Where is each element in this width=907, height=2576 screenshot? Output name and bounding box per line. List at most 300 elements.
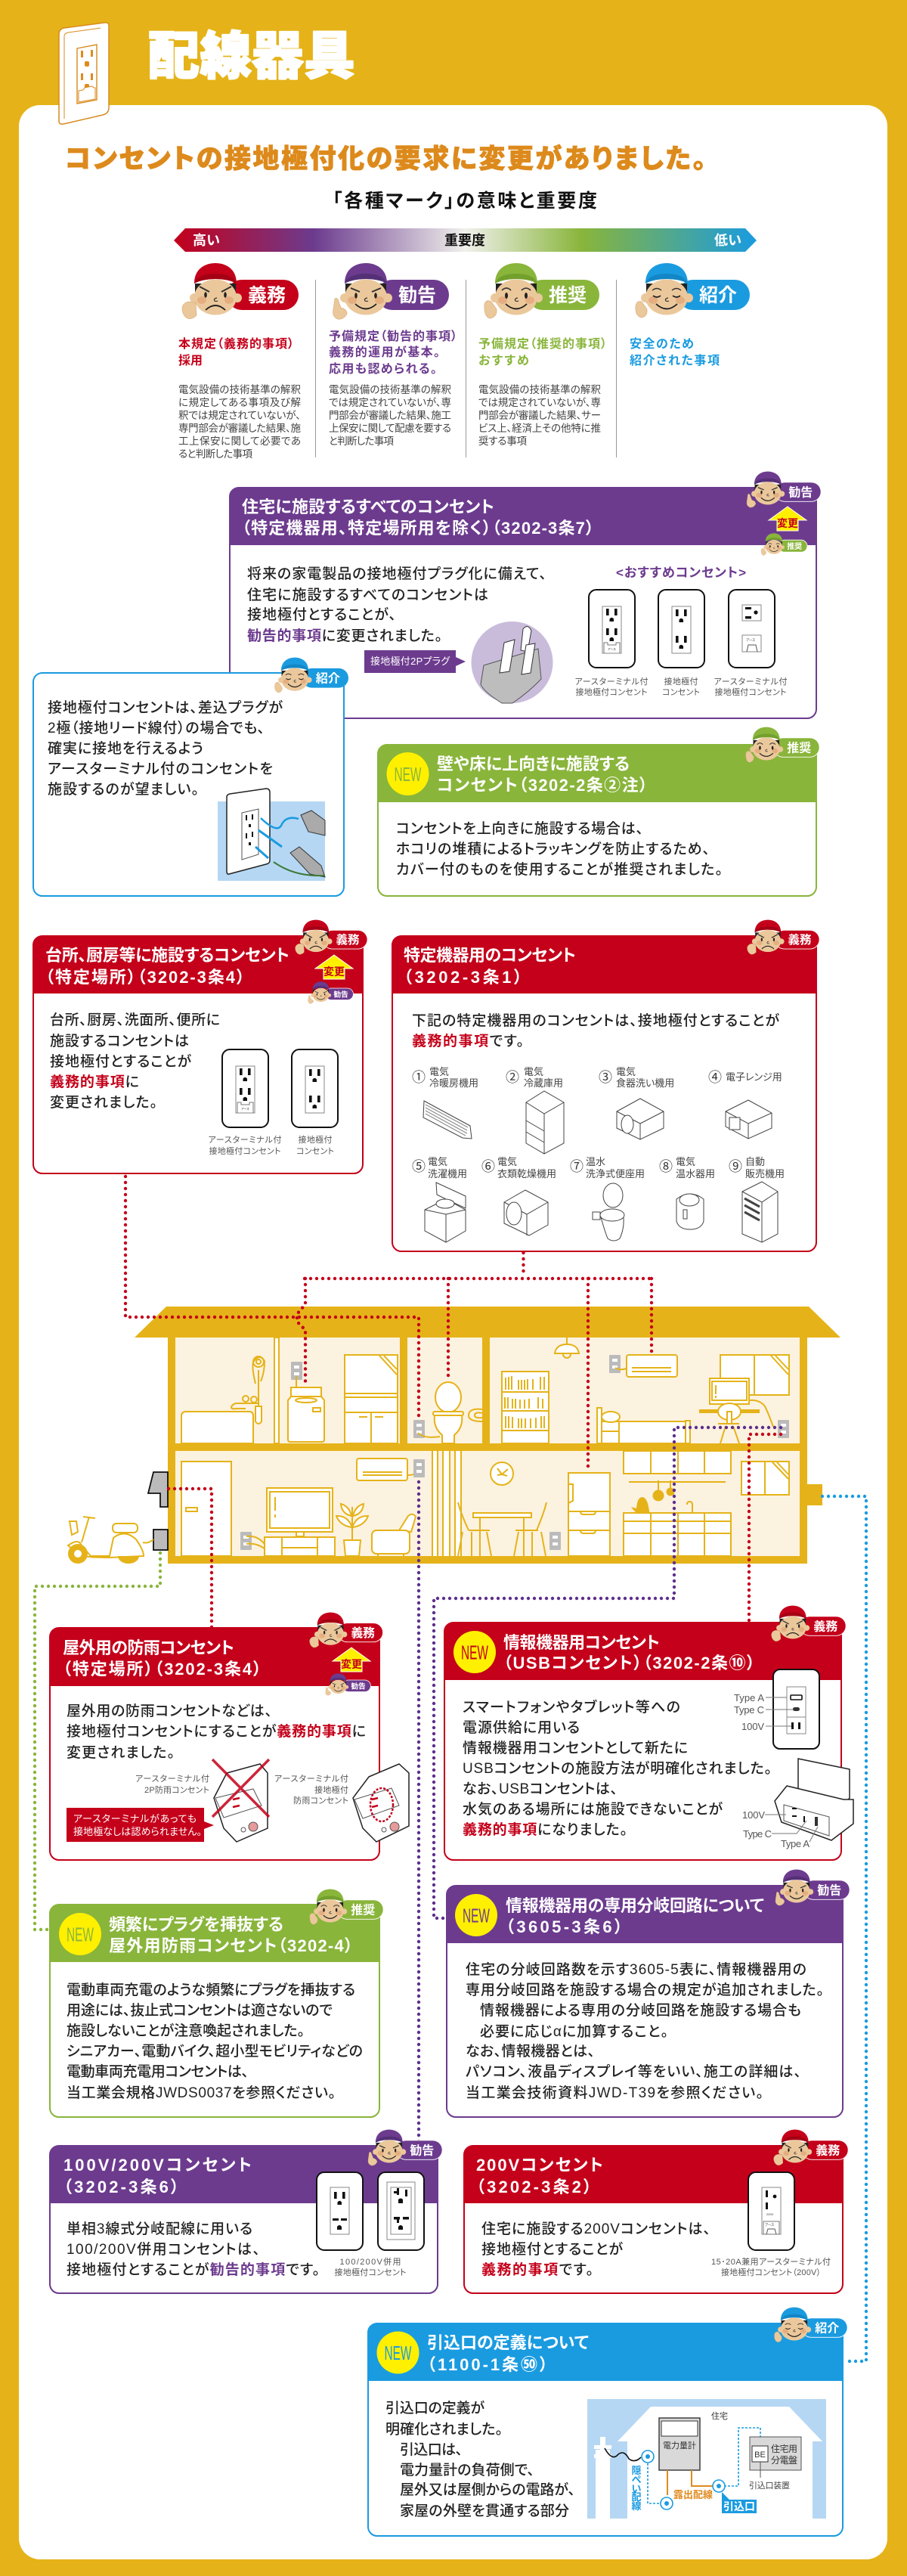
badge: 勧告 xyxy=(368,2130,442,2165)
body text xyxy=(396,820,723,878)
dining table and chairs xyxy=(458,1502,561,1556)
panel heading: 情報機器用の専用分岐回路について xyxy=(506,1896,764,1915)
badge: 推奨 xyxy=(746,727,819,762)
diagram: service entrance: 露出配線 xyxy=(673,2489,713,2500)
panel heading: 屋外用防雨コンセント（3202-4） xyxy=(109,1936,353,1955)
outlet: アース xyxy=(765,2223,775,2227)
outlets: コンセント xyxy=(296,1146,334,1156)
new mark: NEW xyxy=(463,1904,490,1927)
badge: 紹介 xyxy=(275,658,348,693)
badge: 推奨 xyxy=(484,263,599,318)
body text: 施設しないことが注意喚起されました。 xyxy=(67,2023,305,2039)
appliance labels: 電気 xyxy=(428,1156,447,1167)
panel: frequently plugged outdoor outlets xyxy=(50,1889,383,2117)
body text: 屋外又は屋側からの電路が、 xyxy=(400,2481,575,2498)
recommended outlets: コンセント xyxy=(662,687,700,697)
badge: 推奨: 推奨 xyxy=(787,741,811,755)
body text: 用途には、抜止式コンセントは適さないので xyxy=(67,2002,333,2019)
body text: 電源供給に用いる xyxy=(463,1719,580,1736)
panel heading: （USBコンセント）（3202-2条⑩） xyxy=(503,1654,755,1672)
panel heading: 屋外用の防雨コンセント xyxy=(63,1638,234,1657)
mark: 義務: 電気設備の技術基準の解釈 xyxy=(178,383,301,395)
icon: grounded plug xyxy=(472,622,553,703)
appliance labels: 温水 xyxy=(586,1156,605,1167)
body text: 屋外用の防雨コンセントなどは、 xyxy=(67,1703,272,1719)
body text: 義務的事項です。 xyxy=(412,1033,524,1049)
diagram: service entrance: い xyxy=(632,2483,642,2494)
outdoor outlet xyxy=(148,1472,168,1507)
illustration: USB floor outlet: Type C xyxy=(743,1828,772,1840)
appliance labels: 電気 xyxy=(676,1156,695,1167)
body text: 必要に応じαに加算すること。 xyxy=(480,2023,668,2040)
appliance labels: ⑥ xyxy=(481,1159,495,1174)
badge: 義務: 義務 xyxy=(788,932,812,947)
importance gradient arrow: 重要度 xyxy=(444,233,485,248)
body text: 情報機器用コンセントとして新たに xyxy=(463,1740,688,1756)
importance gradient arrow: 低い xyxy=(714,233,741,248)
new mark: NEW xyxy=(384,2342,412,2364)
badge: 義務: 義務 xyxy=(336,932,360,947)
badge: 義務: 義務 xyxy=(813,1619,837,1633)
mark: 義務: 採用 xyxy=(178,354,203,367)
appliance: clothes dryer xyxy=(504,1190,548,1235)
badge: 紹介 xyxy=(636,263,750,318)
illustration: USB wall outlet: Type A xyxy=(734,1692,764,1703)
change arrow xyxy=(333,1648,370,1672)
panel heading xyxy=(404,946,576,987)
panel heading xyxy=(109,1915,353,1955)
mark: 勧告: 電気設備の技術基準の解釈 xyxy=(329,383,452,395)
badge: 義務 xyxy=(772,1606,846,1641)
scooter xyxy=(68,1517,153,1564)
plant xyxy=(336,1504,368,1556)
badge: 紹介: 紹介 xyxy=(316,672,340,686)
illustration: USB wall outlet: 100V xyxy=(741,1721,764,1732)
body text: 将来の家電製品の接地極付プラグ化に備えて、 xyxy=(247,566,546,582)
illustration: USB wall outlet: Type C xyxy=(734,1704,764,1716)
appliance: air conditioner xyxy=(423,1101,472,1139)
appliance labels: 冷蔵庫用 xyxy=(524,1077,563,1089)
illustration: grounded rainproof outlet: 防雨コンセント xyxy=(293,1795,348,1806)
recommended outlets: 接地極付 xyxy=(664,676,698,687)
mark: 勧告: と判断した事項 xyxy=(329,436,395,447)
panel heading: コンセント（3202-2条②注） xyxy=(437,776,648,795)
illustration: grounded rainproof outlet: 接地極付 xyxy=(314,1784,348,1795)
outlet xyxy=(711,2172,831,2277)
outlet: 15･20A兼用アースターミナル付 xyxy=(711,2257,831,2267)
panel heading: （1100-1条㊿） xyxy=(427,2355,548,2374)
recommended outlets: アースターミナル付 xyxy=(714,677,788,687)
badge: 紹介 xyxy=(774,2308,847,2342)
small badge: 勧告: 勧告 xyxy=(333,989,348,999)
body text xyxy=(67,2221,320,2278)
body text: 変更されました。 xyxy=(67,1744,175,1761)
body text xyxy=(385,2400,575,2519)
diagram: service entrance: 住宅用 xyxy=(771,2444,797,2454)
change arrow xyxy=(315,955,353,979)
body text xyxy=(463,1698,772,1838)
body text: 義務的事項に xyxy=(50,1074,139,1090)
mark: 義務 xyxy=(178,263,301,460)
panel heading: （3605-3条6） xyxy=(506,1917,623,1936)
body text: なお、USBコンセントは、 xyxy=(463,1781,618,1797)
mark: 推奨 xyxy=(478,263,607,447)
badge: 義務: 義務 xyxy=(351,1626,375,1640)
body text: 台所、厨房、洗面所、便所に xyxy=(50,1012,220,1028)
heading: marks and importance: 「各種マーク」の意味と重要度 xyxy=(333,191,597,212)
body text: 当工業会技術資料JWD-T39を参照ください。 xyxy=(466,2085,763,2101)
mark: 義務: ると判断した事項 xyxy=(178,448,252,460)
body text: アースターミナル付のコンセントを xyxy=(48,761,273,777)
appliance labels: 電気 xyxy=(524,1066,543,1077)
appliance: dishwasher xyxy=(617,1099,664,1139)
mark: 推奨: 門部会が審議した結果、サー xyxy=(478,409,601,421)
appliance labels: 温水器用 xyxy=(676,1168,715,1180)
house cross-section xyxy=(68,1307,840,1564)
panel: all residential outlets xyxy=(230,472,821,718)
bath xyxy=(181,1356,265,1443)
upstairs window xyxy=(720,1355,789,1395)
door xyxy=(181,1462,231,1556)
appliance labels: 電気 xyxy=(429,1066,449,1077)
diagram: service entrance: 引込口 xyxy=(723,2500,755,2512)
new mark xyxy=(59,1913,101,1955)
body text: パソコン、液晶ディスプレイ等をいい、施工の詳細は、 xyxy=(465,2063,801,2080)
note: red callout: 接地極なしは認められません。 xyxy=(73,1826,202,1837)
mark: 紹介: 安全のため xyxy=(630,336,694,351)
new mark xyxy=(387,752,429,795)
outlets: 接地極付 xyxy=(298,1134,333,1145)
panel heading xyxy=(63,1638,262,1679)
body text: コンセントを上向きに施設する場合は、 xyxy=(396,820,643,837)
appliance labels: ⑦ xyxy=(570,1159,584,1174)
bed xyxy=(597,1408,690,1443)
badge: 義務 xyxy=(296,920,367,954)
appliance labels: 電気 xyxy=(616,1066,636,1077)
body text xyxy=(67,1982,363,2101)
body text xyxy=(481,2221,710,2278)
panel: kitchen outlets xyxy=(33,920,367,1173)
recommended outlets: <おすすめコンセント> xyxy=(616,566,746,580)
mark: 紹介: 紹介された事項 xyxy=(630,353,720,367)
small badge: 勧告 xyxy=(308,981,353,1003)
illustration: plugging into ground terminal xyxy=(218,789,325,881)
diagram: service entrance xyxy=(587,2399,826,2519)
body text: 引込口は、 xyxy=(400,2441,463,2458)
badge: 義務 xyxy=(748,920,819,954)
badge: 義務 xyxy=(310,1613,383,1648)
appliance labels: ① xyxy=(412,1070,426,1085)
mark: 勧告: 予備規定（勧告的事項） xyxy=(329,329,457,343)
importance gradient arrow xyxy=(174,228,757,252)
badge: 義務 xyxy=(774,2130,848,2165)
outdoor charging outlet xyxy=(153,1530,168,1550)
recommended outlets: 接地極付コンセント xyxy=(715,687,786,697)
panel heading: （特定場所）（3202-3条4） xyxy=(63,1660,262,1679)
body text: なお、情報機器とは、 xyxy=(466,2043,595,2060)
panel heading: （3202-3条6） xyxy=(63,2178,179,2196)
appliance labels: ③ xyxy=(599,1070,612,1085)
desk with computer xyxy=(699,1378,789,1443)
badge: 勧告 xyxy=(333,263,449,319)
service entrance box xyxy=(807,1484,822,1505)
diagram: service entrance: ぺ xyxy=(632,2474,642,2485)
body text: ホコリの堆積によるトラッキングを防止するため、 xyxy=(396,841,710,857)
body text: 専用分岐回路を施設する場合の規定が追加されました。 xyxy=(466,1982,824,1998)
outlets: 接地極付コンセント xyxy=(334,2267,407,2277)
badge: 勧告: 勧告 xyxy=(410,2144,434,2157)
dotted connectors xyxy=(35,1176,866,2361)
appliance labels: 販売機用 xyxy=(745,1168,785,1180)
mark: 推奨: 奨する事項 xyxy=(478,436,528,447)
new mark: NEW xyxy=(461,1641,488,1663)
panel heading xyxy=(427,2333,589,2374)
panel: 紹介 ground outlet note xyxy=(33,658,348,896)
badge: 紹介: 紹介 xyxy=(815,2321,839,2335)
kitchen xyxy=(624,1451,731,1556)
appliance labels: 電気 xyxy=(497,1156,517,1167)
panel: dedicated branch circuit xyxy=(447,1870,850,2117)
new mark: NEW xyxy=(67,1923,94,1946)
body text: 接地極付とすることが xyxy=(50,1053,191,1070)
body text xyxy=(48,699,283,798)
bookshelf xyxy=(502,1372,549,1443)
television xyxy=(240,1488,335,1556)
appliance labels xyxy=(412,1066,785,1180)
diagram: service entrance: 引込口装置 xyxy=(749,2480,790,2491)
body text: 施設するのが望ましい。 xyxy=(48,781,199,798)
outlet: 接地極付コンセント（200V） xyxy=(721,2267,821,2277)
diagram: service entrance: 住宅 xyxy=(711,2410,728,2421)
recommended outlets xyxy=(574,566,788,697)
panel heading xyxy=(506,1896,764,1936)
upstairs air conditioner xyxy=(609,1355,677,1377)
appliance labels: 洗浄式便座用 xyxy=(586,1168,645,1180)
body text: 100/200V併用コンセントは、 xyxy=(67,2241,260,2258)
panel: upward outlets xyxy=(378,727,819,896)
heading: main message: コンセントの接地極付化の要求に変更がありました。 xyxy=(65,144,706,174)
change arrow xyxy=(769,507,806,531)
body text xyxy=(67,1703,366,1761)
body text: 情報機器による専用の分岐回路を施設する場合も xyxy=(480,2002,801,2019)
body text: USBコンセントの施設方法が明確化されました。 xyxy=(463,1760,772,1777)
body text: 電動車両充電のような頻繁にプラグを挿抜する xyxy=(67,1982,355,1998)
downstairs air conditioner xyxy=(357,1458,425,1480)
outlets xyxy=(209,1049,338,1156)
appliance labels: ② xyxy=(506,1070,519,1085)
body text: 電動車両充電用コンセントは、 xyxy=(67,2063,249,2080)
appliance: microwave xyxy=(726,1100,772,1139)
badge: 推奨: 推奨 xyxy=(549,285,587,306)
badge: 勧告: 勧告 xyxy=(817,1883,841,1897)
mark: 勧告: 義務的運用が基本。 xyxy=(329,345,440,359)
badge: 推奨: 推奨 xyxy=(351,1903,375,1917)
panel heading: 頻繁にプラグを挿抜する xyxy=(109,1915,283,1934)
body text: 義務的事項になりました。 xyxy=(463,1821,627,1838)
appliance: refrigerator xyxy=(526,1091,564,1154)
illustration: 2P rainproof outlet not allowed: アースターミナル付 xyxy=(135,1774,209,1784)
outlets: アースターミナル付 xyxy=(209,1135,281,1145)
new mark: NEW xyxy=(395,763,422,786)
column dividers xyxy=(316,280,617,457)
mark: 紹介 xyxy=(630,263,750,367)
mark: 推奨: では規定されていないが、専 xyxy=(478,397,601,408)
appliance labels: 冷暖房機用 xyxy=(429,1077,478,1089)
mark: 勧告: 上保安に関して配慮を要する xyxy=(329,423,451,434)
change arrow: 変更 xyxy=(341,1658,362,1670)
panel heading: 壁や床に上向きに施設する xyxy=(437,755,630,773)
panel heading: （特定場所）（3202-3条4） xyxy=(45,968,245,987)
body text: スマートフォンやタブレット等への xyxy=(463,1698,680,1716)
badge: 推奨 xyxy=(310,1889,383,1924)
illustration: USB floor outlet xyxy=(742,1759,853,1849)
body text: 接地極付とすることが勧告的事項です。 xyxy=(67,2261,320,2278)
mark: 勧告: 門部会が審議した結果、施工 xyxy=(329,409,451,421)
body text xyxy=(465,1961,824,2101)
mark: 勧告: では規定されていないが、専 xyxy=(329,397,451,408)
small badge: 推奨: 推奨 xyxy=(787,541,802,551)
panel heading xyxy=(437,755,648,795)
appliance labels: ④ xyxy=(708,1070,722,1085)
panel heading xyxy=(63,2156,252,2196)
lamp xyxy=(555,1338,579,1358)
body text: 住宅に施設する200Vコンセントは、 xyxy=(481,2221,710,2237)
badge: 義務: 義務 xyxy=(248,285,286,306)
illustration: 2P rainproof outlet not allowed xyxy=(135,1759,269,1842)
outlets xyxy=(317,2172,424,2277)
icon: outlet plate xyxy=(59,23,109,124)
body text: 住宅に施設するすべてのコンセントは xyxy=(247,587,488,603)
illustration: grounded rainproof outlet: アースターミナル付 xyxy=(274,1774,348,1784)
body text: 勧告的事項に変更されました。 xyxy=(247,628,442,644)
panel: specific appliances xyxy=(392,920,819,1251)
outlet: 200V xyxy=(766,2212,774,2216)
armchair xyxy=(372,1514,416,1556)
diagram: service entrance: 分電盤 xyxy=(771,2455,797,2466)
title: 配線器具 xyxy=(148,28,355,85)
appliance: washing machine xyxy=(425,1183,466,1242)
small badge: 勧告 xyxy=(326,1673,370,1695)
panel: 100V/200V outlets xyxy=(50,2130,442,2293)
appliance labels: 洗濯機用 xyxy=(428,1168,467,1180)
panel heading: （3202-3条1） xyxy=(404,968,522,987)
mark: 勧告: 応用も認められる。 xyxy=(329,362,437,376)
panel heading xyxy=(503,1633,755,1672)
diagram: service entrance: BE xyxy=(754,2450,766,2460)
mark: 義務: に規定してある事項及び解 xyxy=(178,397,301,408)
fridge xyxy=(568,1473,610,1556)
illustration: USB floor outlet: Type A xyxy=(781,1838,809,1849)
body text: 当工業会規格JWDS0037を参照ください。 xyxy=(67,2085,336,2101)
mark: 推奨: ビス上、経済上その他特に推 xyxy=(478,423,601,434)
body text xyxy=(50,1012,220,1111)
body text: 下記の特定機器用のコンセントは、接地極付とすることが xyxy=(412,1012,779,1029)
body text: 施設するコンセントは xyxy=(50,1033,189,1049)
body text: 2極（接地リード線付）の場合でも、 xyxy=(48,720,265,736)
appliance: vending machine xyxy=(742,1182,778,1242)
panel heading: 100V/200Vコンセント xyxy=(63,2156,252,2175)
outlets: 100/200V併用 xyxy=(340,2256,401,2267)
badge: 勧告 xyxy=(747,472,821,507)
diagram: service entrance: 隠 xyxy=(631,2465,642,2476)
badge: 勧告: 勧告 xyxy=(398,285,436,306)
walls and floors xyxy=(175,1338,800,1556)
body text: 明確化されました。 xyxy=(385,2421,503,2438)
small badge: 勧告: 勧告 xyxy=(351,1681,366,1691)
panel: outdoor rainproof outlets xyxy=(50,1613,409,1860)
body text xyxy=(412,1012,779,1049)
panel heading xyxy=(476,2156,603,2196)
mark: 義務: 本規定（義務的事項） xyxy=(178,336,294,351)
body text: 住宅の分岐回路数を示す3605-5表に、情報機器用の xyxy=(466,1961,806,1978)
vanity xyxy=(345,1355,398,1443)
new mark xyxy=(455,1894,497,1936)
washing machine xyxy=(288,1362,324,1442)
mark: 義務: 釈では規定されていないが、 xyxy=(178,410,301,421)
appliance labels: 自動 xyxy=(745,1156,765,1167)
panel heading: 台所、厨房等に施設するコンセント xyxy=(45,946,289,965)
panel: 200V outlets xyxy=(464,2130,848,2293)
diagram: service entrance: 電力量計 xyxy=(663,2440,696,2450)
panel heading: 200Vコンセント xyxy=(476,2156,603,2175)
mark: 推奨: おすすめ xyxy=(478,354,529,367)
plug label xyxy=(364,650,466,673)
outlets: 接地極付コンセント xyxy=(209,1145,281,1156)
downstairs window xyxy=(741,1462,789,1495)
illustration: 2P rainproof outlet not allowed: 2P防雨コンセント xyxy=(144,1784,209,1795)
body text: シニアカー、電動バイク、超小型モビリティなどの xyxy=(67,2043,363,2060)
body text xyxy=(247,566,546,644)
change arrow: 変更 xyxy=(323,966,345,978)
panel heading: （特定機器用、特定場所用を除く）（3202-3条7） xyxy=(242,519,594,538)
roof xyxy=(135,1307,840,1338)
mark: 義務: 工上保安に関して必要であ xyxy=(178,436,301,447)
badge: 紹介: 紹介 xyxy=(699,285,737,306)
panel: service entrance definition xyxy=(368,2308,847,2536)
panel heading: （3202-3条2） xyxy=(476,2178,592,2196)
appliance labels: 衣類乾燥機用 xyxy=(497,1168,556,1180)
diagram: service entrance: 線 xyxy=(631,2500,642,2512)
appliance labels: 食器洗い機用 xyxy=(616,1077,674,1089)
body text: 接地極付とすることが、 xyxy=(247,606,396,623)
recommended outlets: 接地極付コンセント xyxy=(576,687,647,697)
panel heading: 情報機器用コンセント xyxy=(503,1633,660,1652)
body text: 水気のある場所には施設できないことが xyxy=(463,1801,723,1818)
importance gradient arrow: 高い xyxy=(193,233,220,248)
appliance: washlet toilet xyxy=(593,1183,624,1241)
badge: 勧告: 勧告 xyxy=(788,485,813,499)
clock xyxy=(491,1462,513,1485)
change arrow: 変更 xyxy=(777,517,798,529)
panel heading xyxy=(45,946,289,987)
body text: 引込口の定義が xyxy=(385,2400,484,2416)
body text: 義務的事項です。 xyxy=(481,2261,593,2278)
body text: カバー付のものを使用することが推奨されました。 xyxy=(396,861,723,878)
diagram: service entrance: 配 xyxy=(631,2491,642,2503)
note: red callout: アースターミナルがあっても xyxy=(73,1813,197,1824)
thin wall and column xyxy=(274,1338,461,1556)
panel: USB outlets xyxy=(444,1606,853,1860)
body text: 変更されました。 xyxy=(50,1094,157,1111)
badge: 義務 xyxy=(182,263,299,319)
badge: 義務: 義務 xyxy=(816,2143,840,2157)
body text: 確実に接地を行えるよう xyxy=(48,740,203,757)
new mark xyxy=(454,1631,496,1673)
mark: 推奨: 予備規定（推奨的事項） xyxy=(478,336,607,351)
mark: 勧告 xyxy=(329,263,457,447)
new mark xyxy=(376,2332,419,2374)
illustration: USB floor outlet: 100V xyxy=(742,1809,765,1821)
